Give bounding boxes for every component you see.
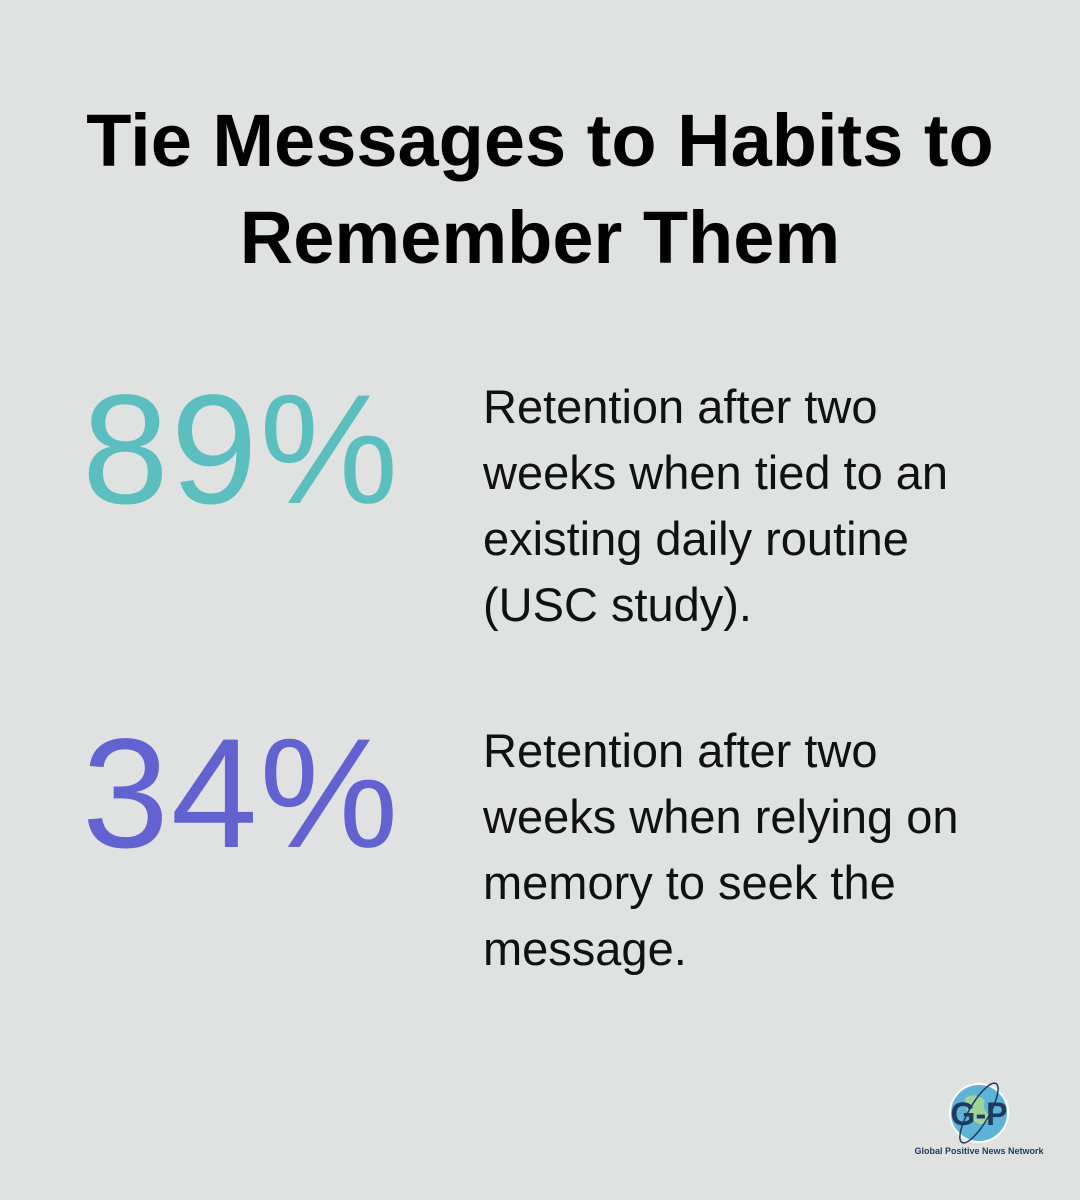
logo bbox=[915, 1082, 1045, 1156]
text: 89% description bbox=[483, 380, 948, 631]
title: Remember Them bbox=[240, 196, 840, 279]
logo: G-P bbox=[951, 1096, 1007, 1132]
stat: 89%: 89% bbox=[82, 363, 400, 537]
text: 34% description: memory to seek the bbox=[483, 856, 896, 909]
text: 34% description: message. bbox=[483, 922, 687, 975]
text: 34% description: Retention after two bbox=[483, 724, 878, 777]
text: 89% description: Retention after two bbox=[483, 380, 878, 433]
text: 89% description: existing daily routine bbox=[483, 512, 909, 565]
text: 89% description: weeks when tied to an bbox=[483, 446, 948, 499]
text: 34% description bbox=[483, 724, 958, 975]
title bbox=[86, 99, 994, 279]
text: 34% description: weeks when relying on bbox=[483, 790, 958, 843]
stat: 34%: 34% bbox=[82, 707, 400, 881]
text: 89% description: (USC study). bbox=[483, 578, 752, 631]
logo: Global Positive News Network bbox=[915, 1146, 1045, 1156]
title: Tie Messages to Habits to bbox=[86, 99, 994, 182]
